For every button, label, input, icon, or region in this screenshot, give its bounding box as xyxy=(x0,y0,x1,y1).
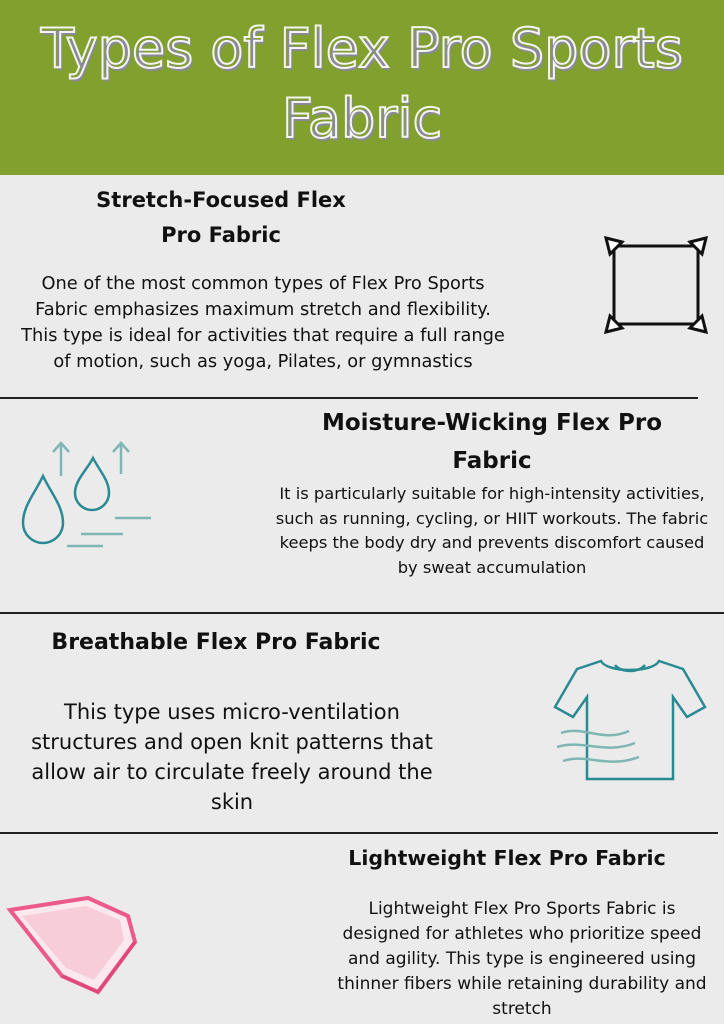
text: stretch: One of the most common types of Flex Pro Sports xyxy=(42,273,484,294)
title xyxy=(40,24,683,142)
heading: moisture xyxy=(322,410,662,474)
text: stretch: of motion, such as yoga, Pilates, or gymnastics xyxy=(53,351,473,372)
text: breathable: This type uses micro-ventilation xyxy=(64,700,400,724)
text: lightweight xyxy=(337,899,707,1019)
text: moisture: It is particularly suitable for high-intensity activities, xyxy=(279,484,705,503)
text: moisture: keeps the body dry and prevents discomfort caused xyxy=(280,533,704,552)
text: moisture: such as running, cycling, or HIIT workouts. The fabric xyxy=(276,508,708,528)
text: breathable: allow air to circulate freely around the xyxy=(31,760,433,784)
text: lightweight: stretch xyxy=(492,999,552,1019)
text: stretch: Fabric emphasizes maximum stretch and flexibility. xyxy=(35,299,491,320)
heading: lightweight: Lightweight Flex Pro Fabric xyxy=(348,846,666,870)
icon: water drops xyxy=(22,441,151,548)
text: breathable: structures and open knit patterns that xyxy=(31,730,433,754)
text: lightweight: Lightweight Flex Pro Sports Fabric is xyxy=(368,899,676,919)
text: breathable: skin xyxy=(211,790,253,814)
text: lightweight: and agility. This type is engineered using xyxy=(348,949,696,969)
text: moisture: by sweat accumulation xyxy=(398,558,586,576)
text: stretch: This type is ideal for activities that require a full range xyxy=(21,325,505,346)
heading: stretch: Pro Fabric xyxy=(161,223,281,247)
heading: stretch xyxy=(96,188,346,247)
heading: breathable: Breathable Flex Pro Fabric xyxy=(51,630,381,655)
title banner xyxy=(0,0,724,175)
text: breathable xyxy=(31,700,433,814)
text: lightweight: designed for athletes who prioritize speed xyxy=(343,924,701,944)
icon: t-shirt with air xyxy=(553,660,707,780)
text: stretch xyxy=(21,273,505,372)
icon: pink scarf xyxy=(6,896,138,994)
icon: stretch square xyxy=(604,236,708,334)
text: moisture xyxy=(276,484,708,576)
text: lightweight: thinner fibers while retaining durability and xyxy=(337,974,707,994)
heading: moisture: Moisture-Wicking Flex Pro xyxy=(322,410,662,436)
heading: stretch: Stretch-Focused Flex xyxy=(96,188,346,212)
heading: moisture: Fabric xyxy=(452,448,532,474)
